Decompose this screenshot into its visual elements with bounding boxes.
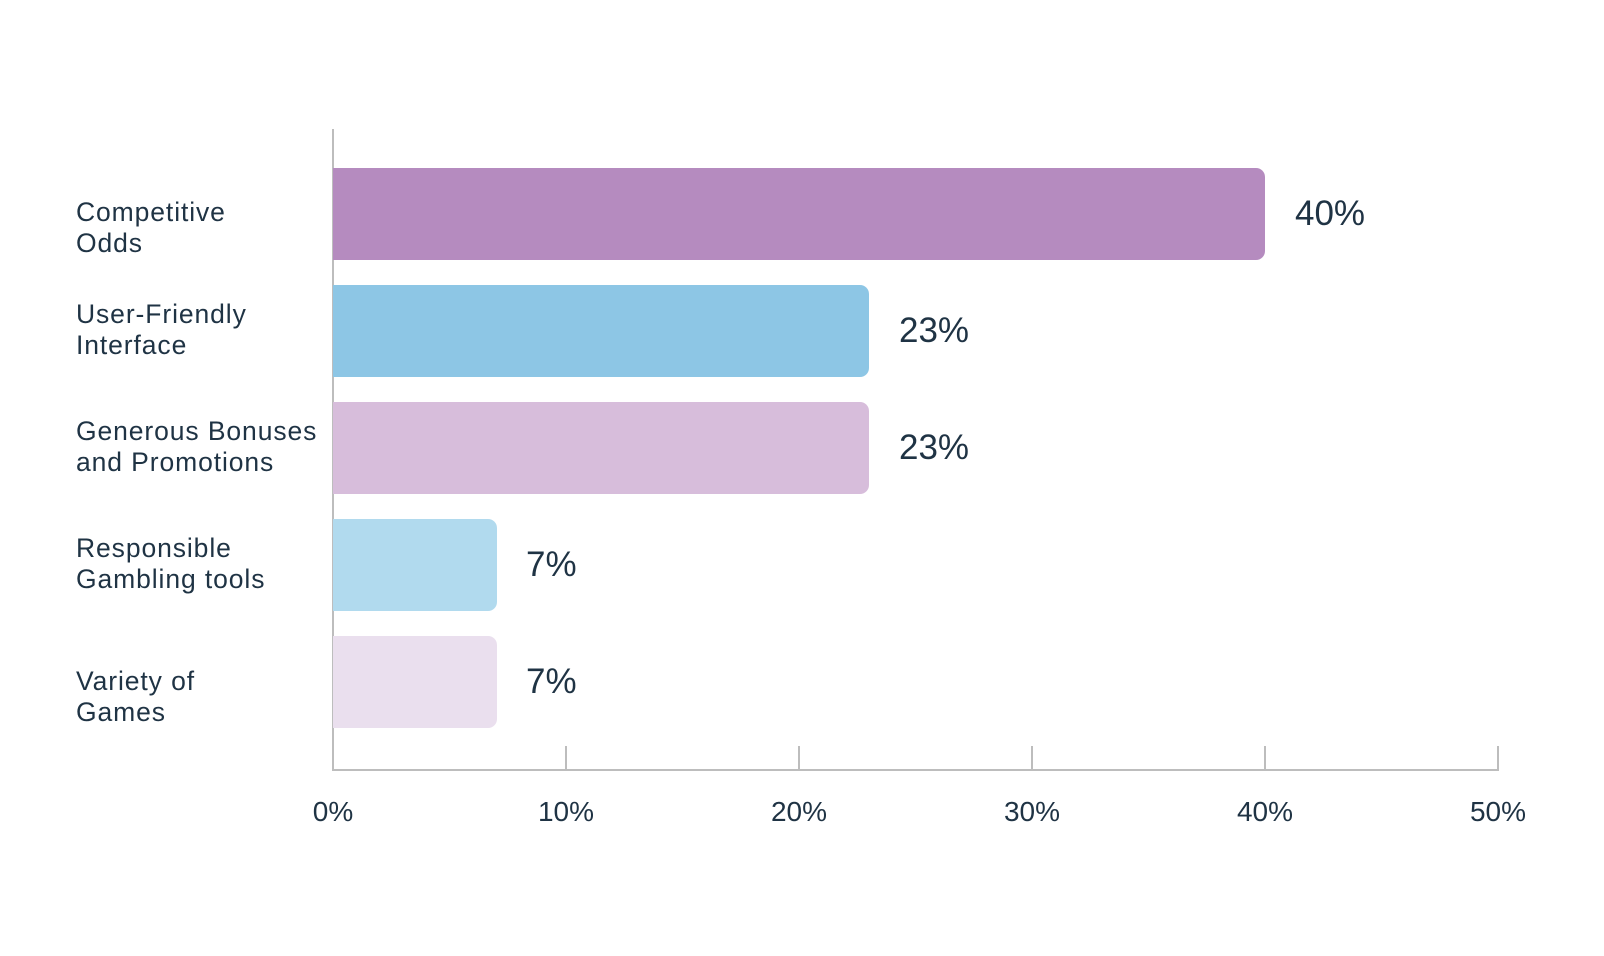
bar: Generous Bonuses [333,402,869,494]
label: Variety of Games [76,666,195,727]
x axis [332,769,1499,771]
label: Competitive Odds [76,197,226,258]
label: Generous Bonuses and Promotions [76,416,317,477]
bar: Competitive Odds [333,168,1265,260]
label: Competitive Odds: Competitive [76,197,226,227]
bar: Variety of Games [333,636,497,728]
tick labels: 30% [1004,796,1060,827]
label: Variety of Games: Variety of [76,666,195,696]
label: Responsible Gambling tools [76,533,265,594]
value: 23%: 23% [899,428,969,467]
label: User-Friendly Interface [76,299,247,360]
label: Responsible Gambling tools: Gambling tools [76,564,265,594]
value: 7%: 7% [526,545,577,584]
value: 40%: 40% [1295,194,1365,233]
label: Responsible Gambling tools: Responsible [76,533,232,563]
label: User-Friendly Interface: Interface [76,330,187,360]
label: User-Friendly Interface: User-Friendly [76,299,247,329]
label: Variety of Games: Games [76,697,166,727]
tick labels: 50% [1470,796,1526,827]
tick labels: 0% [313,796,353,827]
bar: Responsible Gambling tools [333,519,497,611]
value: 23%: 23% [899,311,969,350]
label: Competitive Odds: Odds [76,228,143,258]
tick labels: 40% [1237,796,1293,827]
tick labels: 10% [538,796,594,827]
bar: User-Friendly Interface [333,285,869,377]
y axis [332,129,334,771]
value: 7%: 7% [526,662,577,701]
label: Generous Bonuses and Promotions: Generous Bonuses [76,416,317,446]
tick labels: 20% [771,796,827,827]
label: Generous Bonuses and Promotions: and Promotions [76,447,274,477]
